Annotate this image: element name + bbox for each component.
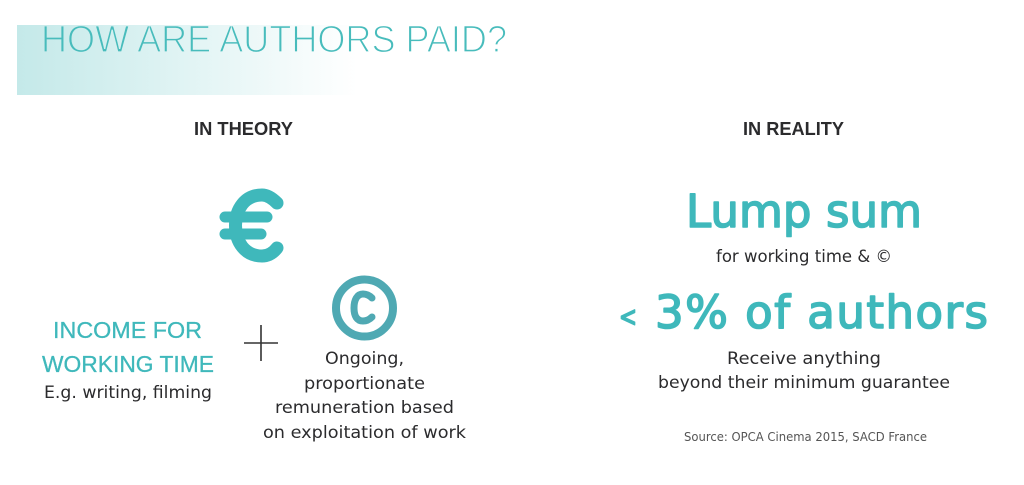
percent of authors: 3% of authors: [655, 286, 988, 339]
copyright description: on exploitation of work: [263, 423, 466, 443]
heading: in theory: IN THEORY: [194, 119, 293, 139]
lump sum note: for working time & ©: [716, 247, 892, 267]
percent description: Receive anything: [727, 349, 881, 369]
source: Source: OPCA Cinema 2015, SACD France: [684, 430, 927, 444]
percent of authors: <: [619, 300, 637, 333]
copyright description: [263, 349, 466, 443]
income example: E.g. writing, filming: [44, 383, 212, 403]
income heading: WORKING TIME: [42, 351, 214, 377]
icon: plus: [244, 325, 278, 361]
percent description: [658, 349, 950, 393]
lump sum: Lump sum: [686, 185, 922, 238]
income heading: INCOME FOR: [53, 317, 202, 343]
copyright description: Ongoing,: [325, 349, 404, 369]
title: HOW ARE AUTHORS PAID?: [41, 19, 507, 61]
income heading: [42, 317, 214, 377]
icon: copyright: [336, 280, 393, 336]
copyright description: remuneration based: [275, 398, 454, 418]
icon: euro: [225, 195, 277, 256]
copyright description: proportionate: [304, 374, 425, 394]
title band: [17, 25, 357, 95]
percent description: beyond their minimum guarantee: [658, 373, 950, 393]
panel: in reality: [619, 119, 988, 444]
panel: in theory: [42, 119, 466, 443]
heading: in reality: IN REALITY: [743, 119, 844, 139]
